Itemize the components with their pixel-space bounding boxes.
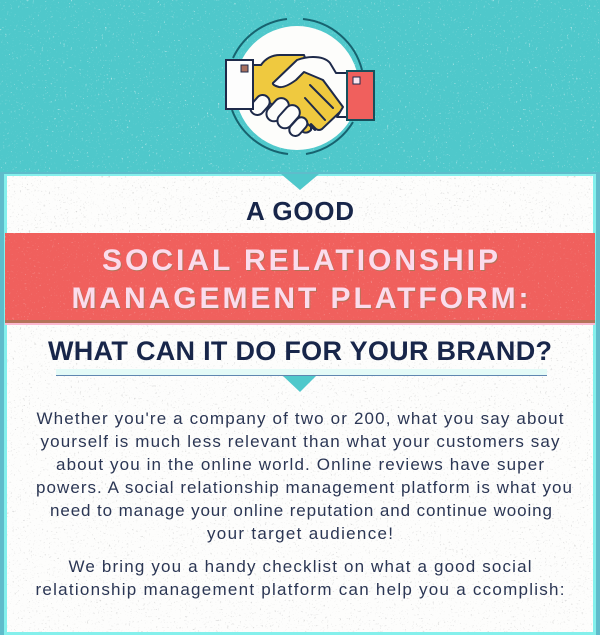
icon: handshake: [226, 19, 374, 154]
red title band: [5, 233, 595, 325]
intro paragraph: about you in the online world. Online reviews have super: [56, 455, 544, 474]
white hand: [273, 57, 347, 117]
white fingers: [247, 92, 310, 138]
heading: a good: A GOOD: [246, 196, 354, 226]
title line 2: MANAGEMENT PLATFORM:: [72, 283, 530, 316]
intro paragraph: need to manage your online reputation and continue wooing: [50, 501, 552, 520]
cuff button: [353, 77, 360, 84]
checklist intro paragraph: We bring you a handy checklist on what a good social: [68, 557, 532, 576]
top notch arrow: [281, 174, 319, 190]
intro paragraph: Whether you're a company of two or 200, what you say about: [36, 409, 564, 428]
title line 1: SOCIAL RELATIONSHIP: [103, 245, 499, 278]
red title band: MANAGEMENT PLATFORM:: [72, 282, 528, 315]
white circle: [235, 26, 359, 150]
panel: white content card: [0, 172, 600, 635]
checklist intro paragraph: relationship management platform can help you a ccomplish:: [36, 580, 564, 599]
checklist intro paragraph: [36, 557, 564, 599]
intro paragraph: powers. A social relationship management platform is what you: [36, 478, 572, 497]
white cuff: [226, 60, 253, 109]
intro paragraph: [36, 409, 572, 543]
subheading: WHAT CAN IT DO FOR YOUR BRAND?: [48, 336, 552, 366]
red cuff: [347, 71, 374, 120]
intro paragraph: your target audience!: [207, 524, 393, 543]
divider with arrow: [56, 369, 547, 392]
finger lines: [297, 85, 333, 130]
yellow hand: [253, 55, 344, 133]
intro paragraph: yourself is much less relevant than what your customers say: [40, 432, 560, 451]
red title band: SOCIAL RELATIONSHIP: [102, 244, 498, 277]
broken ring: [232, 19, 362, 154]
cuff button: [241, 65, 248, 72]
